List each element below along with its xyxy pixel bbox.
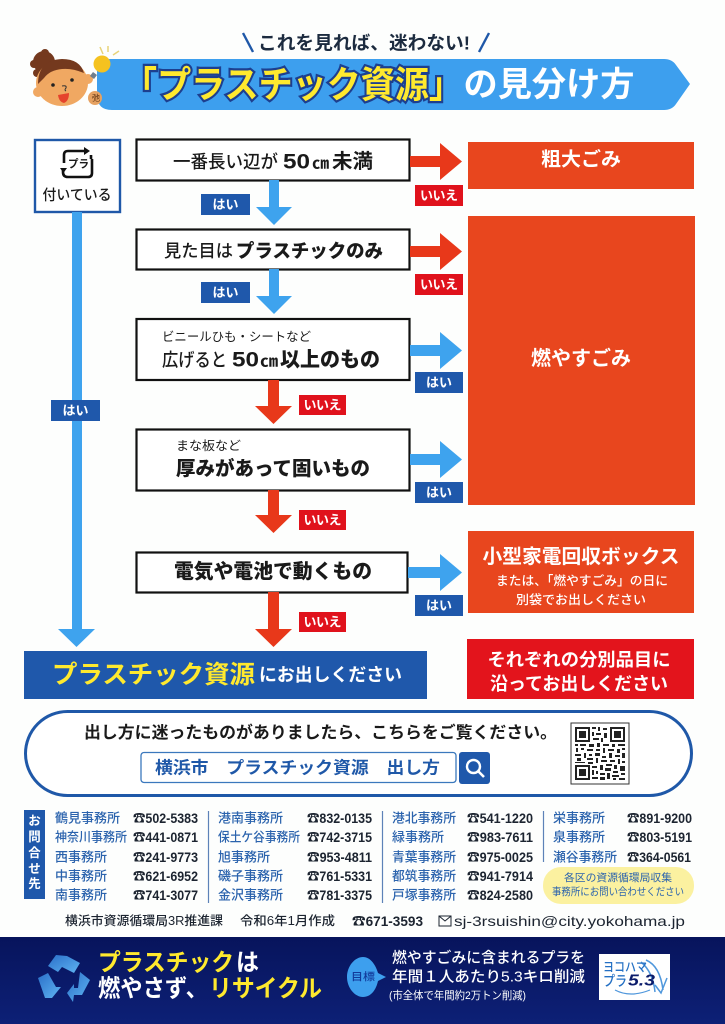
panel: small appliance box: 別袋でお出しください bbox=[516, 592, 646, 607]
question box 1: 一番長い辺が bbox=[173, 151, 278, 172]
contact list: column 3: ☎541-1220 bbox=[467, 810, 533, 826]
panel: put out as plastic resource: にお出しください bbox=[259, 665, 402, 685]
goal text: 燃やすごみに含まれるプラを bbox=[392, 948, 585, 966]
question box 4: まな板など bbox=[176, 439, 242, 453]
logo: Yokohama Pla 5.3 bbox=[599, 954, 670, 1000]
search box bbox=[141, 752, 456, 782]
label: yes 1: はい bbox=[212, 197, 238, 212]
label: yes 3: はい bbox=[426, 375, 452, 390]
panel: search guide bbox=[26, 712, 692, 796]
title banner bbox=[97, 59, 690, 110]
panel: follow each category: 沿ってお出しください bbox=[490, 674, 668, 694]
contact list: column 2: ☎781-3375 bbox=[307, 887, 372, 903]
question box 5: 電気や電池で動くもの bbox=[174, 559, 372, 583]
question box 3 bbox=[136, 319, 410, 380]
footer: department contact: 令和6年1月作成 bbox=[240, 913, 336, 928]
slogan: は bbox=[236, 950, 259, 976]
arrow: box 5 yes bbox=[408, 554, 462, 591]
label: no 5: いいえ bbox=[304, 614, 342, 630]
label: no 1 bbox=[415, 185, 463, 206]
panel: follow each category: それぞれの分別品目に bbox=[488, 650, 670, 670]
label: contact sidebar: 合 bbox=[28, 845, 41, 860]
label: yes 5: はい bbox=[426, 598, 452, 613]
icon: plastic recycling mark: プラ bbox=[68, 158, 89, 170]
arrow: down 4 no bbox=[255, 490, 292, 533]
question box 3: ㎝ bbox=[260, 354, 278, 370]
label: no 3: いいえ bbox=[304, 398, 342, 412]
arrow: box 1 no bbox=[410, 143, 462, 180]
contact list: column 2: 港南事務所 bbox=[218, 810, 283, 826]
label: contact sidebar: せ bbox=[28, 862, 41, 876]
contact list: column 4: ☎364-0561 bbox=[627, 849, 691, 865]
question box 3: 広げると bbox=[162, 350, 227, 370]
contact list: column 2: 旭事務所 bbox=[218, 850, 270, 864]
question box 3: 50 bbox=[232, 348, 259, 372]
icon: search button bbox=[459, 752, 490, 784]
logo: Yokohama Pla 5.3: ヨコハマ bbox=[603, 960, 647, 974]
panel: oversized waste bbox=[468, 142, 694, 189]
contact list: column 2: 金沢事務所 bbox=[218, 888, 283, 902]
question box 4: 厚みがあって固いもの bbox=[176, 457, 370, 480]
label: no 2: いいえ bbox=[420, 277, 458, 292]
icon: character with light bulb: 弛 bbox=[92, 92, 100, 102]
panel: small appliance box bbox=[468, 531, 694, 613]
search box: 横浜市 プラスチック資源 出し方 bbox=[155, 758, 440, 778]
label: contact sidebar: 先 bbox=[28, 876, 41, 891]
contact list: column 3: 戸塚事務所 bbox=[392, 888, 456, 902]
icon: recycling arrows bbox=[38, 955, 90, 1002]
question box 1: 未満 bbox=[332, 150, 373, 173]
arrow: box 3 yes bbox=[410, 332, 462, 369]
panel: recycling mark attached: 付いている bbox=[42, 187, 112, 204]
arrow: down 5 no bbox=[255, 592, 292, 647]
contact list: column 1 bbox=[55, 810, 198, 903]
panel: burnable waste: 燃やすごみ bbox=[531, 346, 631, 370]
contact list: column 3: ☎941-7914 bbox=[467, 868, 533, 884]
contact list: column 3: 港北事務所 bbox=[392, 810, 456, 826]
label: yes 3 bbox=[415, 372, 463, 393]
label: contact sidebar: お bbox=[28, 814, 41, 828]
question box 1: 50 bbox=[283, 150, 310, 174]
label: yes 4 bbox=[415, 482, 463, 503]
question box 2: 見た目は bbox=[164, 241, 233, 261]
QR code bbox=[571, 723, 629, 784]
label: yes 2 bbox=[201, 282, 250, 303]
contact list: column 1: 西事務所 bbox=[55, 850, 107, 864]
goal text: (市全体で年間約2万トン削減) bbox=[389, 988, 526, 1002]
title banner: の見分け方 bbox=[464, 66, 634, 104]
callout: contact your district office: 事務所にお問い合わせください bbox=[552, 885, 684, 898]
panel: search guide: 出し方に迷ったものがありましたら、こちらをご覧ください。 bbox=[84, 722, 557, 742]
contact list: column 4: 栄事務所 bbox=[553, 810, 605, 826]
label: no 3 bbox=[299, 395, 346, 415]
label: contact sidebar: 問 bbox=[28, 830, 41, 844]
contact list: column 4: 瀬谷事務所 bbox=[553, 850, 617, 864]
footer: department contact: ☎671-3593 bbox=[352, 913, 423, 929]
contact list: column 1: 神奈川事務所 bbox=[55, 830, 127, 844]
label: yes 5 bbox=[415, 595, 463, 616]
question box 1: ㎝ bbox=[312, 156, 329, 172]
contact list: column 4: 泉事務所 bbox=[553, 830, 605, 844]
contact list: column 1: ☎502-5383 bbox=[133, 810, 198, 826]
question box 2: プラスチックのみ bbox=[236, 240, 383, 262]
label: yes 2: はい bbox=[212, 285, 238, 300]
panel: recycling mark attached bbox=[35, 140, 120, 212]
label: no 5 bbox=[299, 612, 346, 632]
contact list: column 1: 中事務所 bbox=[55, 868, 107, 884]
question box 5 bbox=[136, 552, 408, 592]
contact list: column 1: ☎621-6952 bbox=[133, 868, 198, 884]
panel: small appliance box: または、「燃やすごみ」の日に bbox=[496, 573, 668, 588]
contact list: column 4 bbox=[553, 810, 692, 865]
panel: put out as plastic resource bbox=[24, 651, 427, 699]
label: no 1: いいえ bbox=[420, 188, 458, 203]
question box 3: 以上のもの bbox=[280, 348, 380, 372]
contact list: column 2: 保土ケ谷事務所 bbox=[218, 830, 300, 844]
arrow: down 1 yes bbox=[256, 180, 292, 225]
goal text bbox=[389, 948, 585, 1002]
arrow: down 3 no bbox=[255, 380, 292, 424]
subtitle: これを見れば、迷わない! bbox=[258, 32, 470, 54]
contact list: column 1: ☎241-9773 bbox=[133, 849, 198, 865]
arrow: long blue down bbox=[58, 212, 95, 647]
contact list: column 4: ☎891-9200 bbox=[627, 810, 692, 826]
arrow: down 2 yes bbox=[256, 269, 292, 314]
slogan bbox=[98, 950, 322, 1002]
callout: goal bubble: 目標 bbox=[351, 970, 376, 983]
contact list: column 1: ☎741-3077 bbox=[133, 887, 198, 903]
label: no 4 bbox=[299, 510, 346, 530]
label: no 2 bbox=[415, 274, 463, 295]
contact list: column 2 bbox=[218, 810, 372, 903]
footer: department contact: 横浜市資源循環局3R推進課 bbox=[65, 913, 224, 928]
contact list: column 1: ☎441-0871 bbox=[133, 829, 198, 845]
contact list: column 2: ☎742-3715 bbox=[307, 829, 372, 845]
icon: character with light bulb bbox=[30, 46, 119, 106]
contact list: column 3: ☎983-7611 bbox=[467, 829, 533, 845]
panel: follow each category bbox=[467, 639, 694, 699]
callout: goal bubble bbox=[347, 957, 386, 997]
panel: bottom band bbox=[0, 937, 725, 1024]
label: no 4: いいえ bbox=[304, 512, 342, 528]
contact list: column 3 bbox=[392, 810, 533, 903]
contact list: column 3: 緑事務所 bbox=[392, 830, 444, 844]
slogan: プラスチック bbox=[98, 950, 234, 976]
contact list: column 2: ☎761-5331 bbox=[307, 868, 372, 884]
question box 2 bbox=[136, 230, 410, 270]
panel: oversized waste: 粗大ごみ bbox=[541, 148, 621, 170]
arrow: box 2 no bbox=[410, 233, 462, 270]
callout: contact your district office bbox=[543, 867, 694, 904]
title banner: 「プラスチック資源」 bbox=[123, 64, 463, 106]
contact list: column 4: ☎803-5191 bbox=[627, 829, 692, 845]
panel: small appliance box: 小型家電回収ボックス bbox=[482, 546, 680, 568]
panel: burnable waste bbox=[468, 216, 695, 505]
contact list: column 2: ☎953-4811 bbox=[307, 849, 372, 865]
label: yes left: はい bbox=[62, 403, 88, 418]
panel: put out as plastic resource: プラスチック資源 bbox=[52, 661, 255, 689]
contact list: column 1: 鶴見事務所 bbox=[55, 810, 120, 826]
arrow: box 4 yes bbox=[410, 441, 462, 478]
label: yes 1 bbox=[201, 194, 250, 215]
logo: Yokohama Pla 5.3: 5.3 bbox=[628, 972, 655, 990]
contact list: column 3: 青葉事務所 bbox=[392, 850, 456, 864]
question box 3: ビニールひも・シートなど bbox=[162, 330, 311, 344]
footer: department contact: sj-3rsuishin@city.yokohama.jp bbox=[454, 913, 685, 929]
contact list: column 2: 磯子事務所 bbox=[218, 868, 283, 884]
contact list: column 3: 都筑事務所 bbox=[392, 868, 456, 884]
slogan: リサイクル bbox=[209, 976, 322, 1002]
label: yes 4: はい bbox=[426, 485, 452, 500]
callout: contact your district office: 各区の資源循環局収集 bbox=[564, 871, 673, 884]
logo: Yokohama Pla 5.3: プラ bbox=[603, 973, 627, 989]
contact list: column 3: ☎975-0025 bbox=[467, 849, 533, 865]
contact list: column 3: ☎824-2580 bbox=[467, 887, 533, 903]
slogan: 燃やさず、 bbox=[98, 976, 208, 1002]
label: contact sidebar bbox=[24, 810, 45, 899]
goal text: 年間１人あたり5.3キロ削減 bbox=[392, 968, 585, 986]
question box 4 bbox=[136, 430, 410, 490]
contact list: column 1: 南事務所 bbox=[55, 888, 107, 902]
footer: department contact bbox=[65, 913, 685, 929]
contact list: column 2: ☎832-0135 bbox=[307, 810, 372, 826]
label: yes left bbox=[51, 400, 100, 421]
question box 1 bbox=[136, 140, 410, 180]
